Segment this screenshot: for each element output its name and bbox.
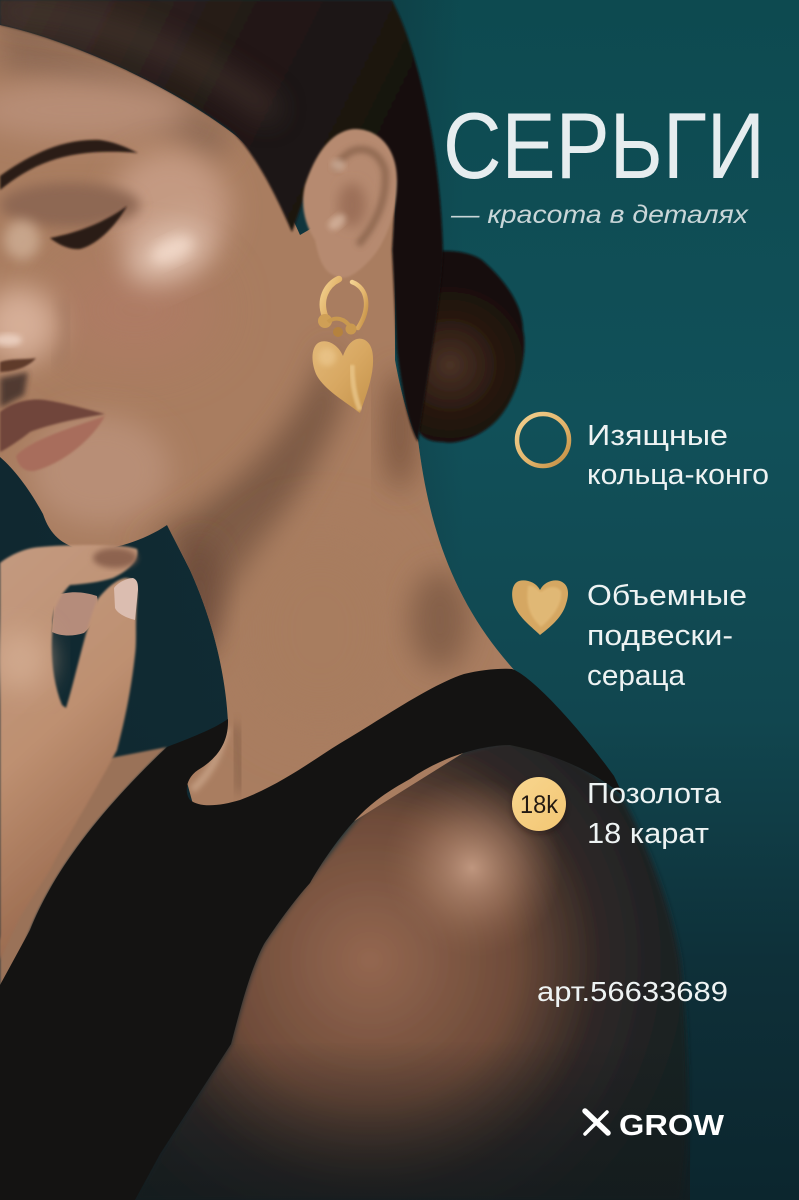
hand xyxy=(0,545,138,960)
plating text: Позолота xyxy=(587,778,722,810)
icon: 18k badge: 18k xyxy=(520,791,558,819)
pendants text xyxy=(587,580,747,692)
logo: X GROW: GROW xyxy=(619,1110,725,1142)
article number: арт.56633689 xyxy=(537,976,728,1007)
hair bun xyxy=(401,251,524,443)
earring xyxy=(312,279,373,413)
plating text: 18 карат xyxy=(587,818,709,850)
hoops text: Изящные xyxy=(587,420,728,452)
eyebrow xyxy=(0,140,138,190)
shoulder and arm xyxy=(135,740,690,1200)
pendants text: подвески- xyxy=(587,620,733,652)
hoop xyxy=(323,279,339,316)
heart pendant xyxy=(312,339,373,413)
plating text xyxy=(587,778,722,850)
face and neck xyxy=(0,0,540,840)
logo: X GROW xyxy=(585,1110,725,1142)
finger behind xyxy=(52,592,98,636)
black dress xyxy=(0,669,624,1200)
closed eye xyxy=(50,206,127,249)
icon: gold ring xyxy=(517,414,569,466)
feature: gold plating xyxy=(512,777,722,850)
ear xyxy=(303,129,397,278)
subtitle: — красота в деталях xyxy=(450,201,750,229)
pendants text: Объемные xyxy=(587,580,747,612)
pendants text: сераца xyxy=(587,660,686,692)
hair xyxy=(0,0,443,442)
fingernail xyxy=(114,578,138,620)
icon: 18k badge xyxy=(512,777,566,834)
lips xyxy=(0,400,105,471)
nose shadow xyxy=(0,358,36,372)
arm sliver behind hand xyxy=(0,747,167,1000)
hoops text xyxy=(587,420,769,491)
beads xyxy=(318,314,332,328)
feature: heart pendants xyxy=(512,580,747,692)
feature: hoops xyxy=(517,414,769,491)
icon: X mark xyxy=(585,1111,608,1134)
hoops text: кольца-конго xyxy=(587,459,769,491)
icon: gold heart xyxy=(512,580,568,635)
